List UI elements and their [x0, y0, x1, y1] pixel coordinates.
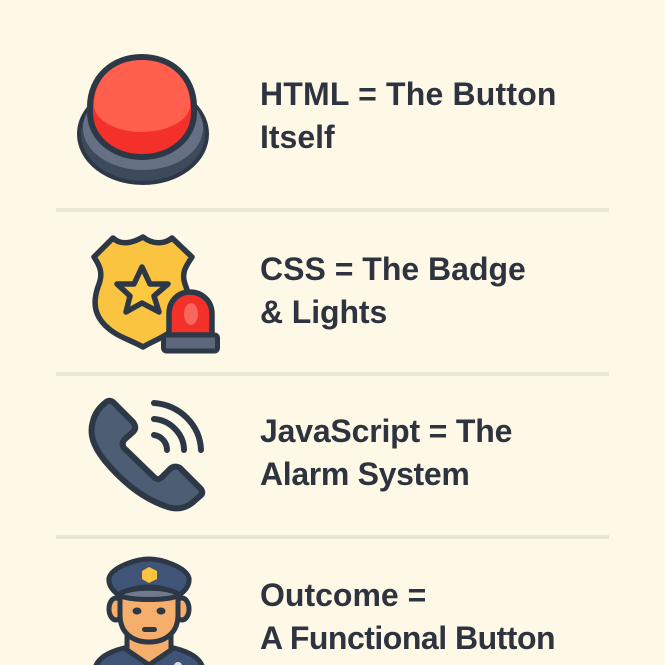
icon: telephone with signal waves [88, 398, 206, 512]
heading: HTML [260, 76, 557, 155]
icon: police badge and siren [91, 234, 220, 354]
heading: JavaScript: JavaScript = The [260, 413, 512, 449]
heading: HTML: HTML = The Button [260, 76, 557, 112]
heading: HTML: Itself [260, 119, 335, 155]
icon: red push button [77, 54, 209, 185]
heading: Outcome: A Functional Button [260, 620, 555, 656]
heading: Outcome: Outcome = [260, 577, 426, 613]
heading: CSS: & Lights [260, 294, 387, 330]
heading: JavaScript [260, 413, 512, 492]
heading: CSS: CSS = The Badge [260, 251, 526, 287]
heading: JavaScript: Alarm System [260, 456, 469, 492]
heading: Outcome [260, 577, 555, 656]
heading: CSS [260, 251, 526, 330]
